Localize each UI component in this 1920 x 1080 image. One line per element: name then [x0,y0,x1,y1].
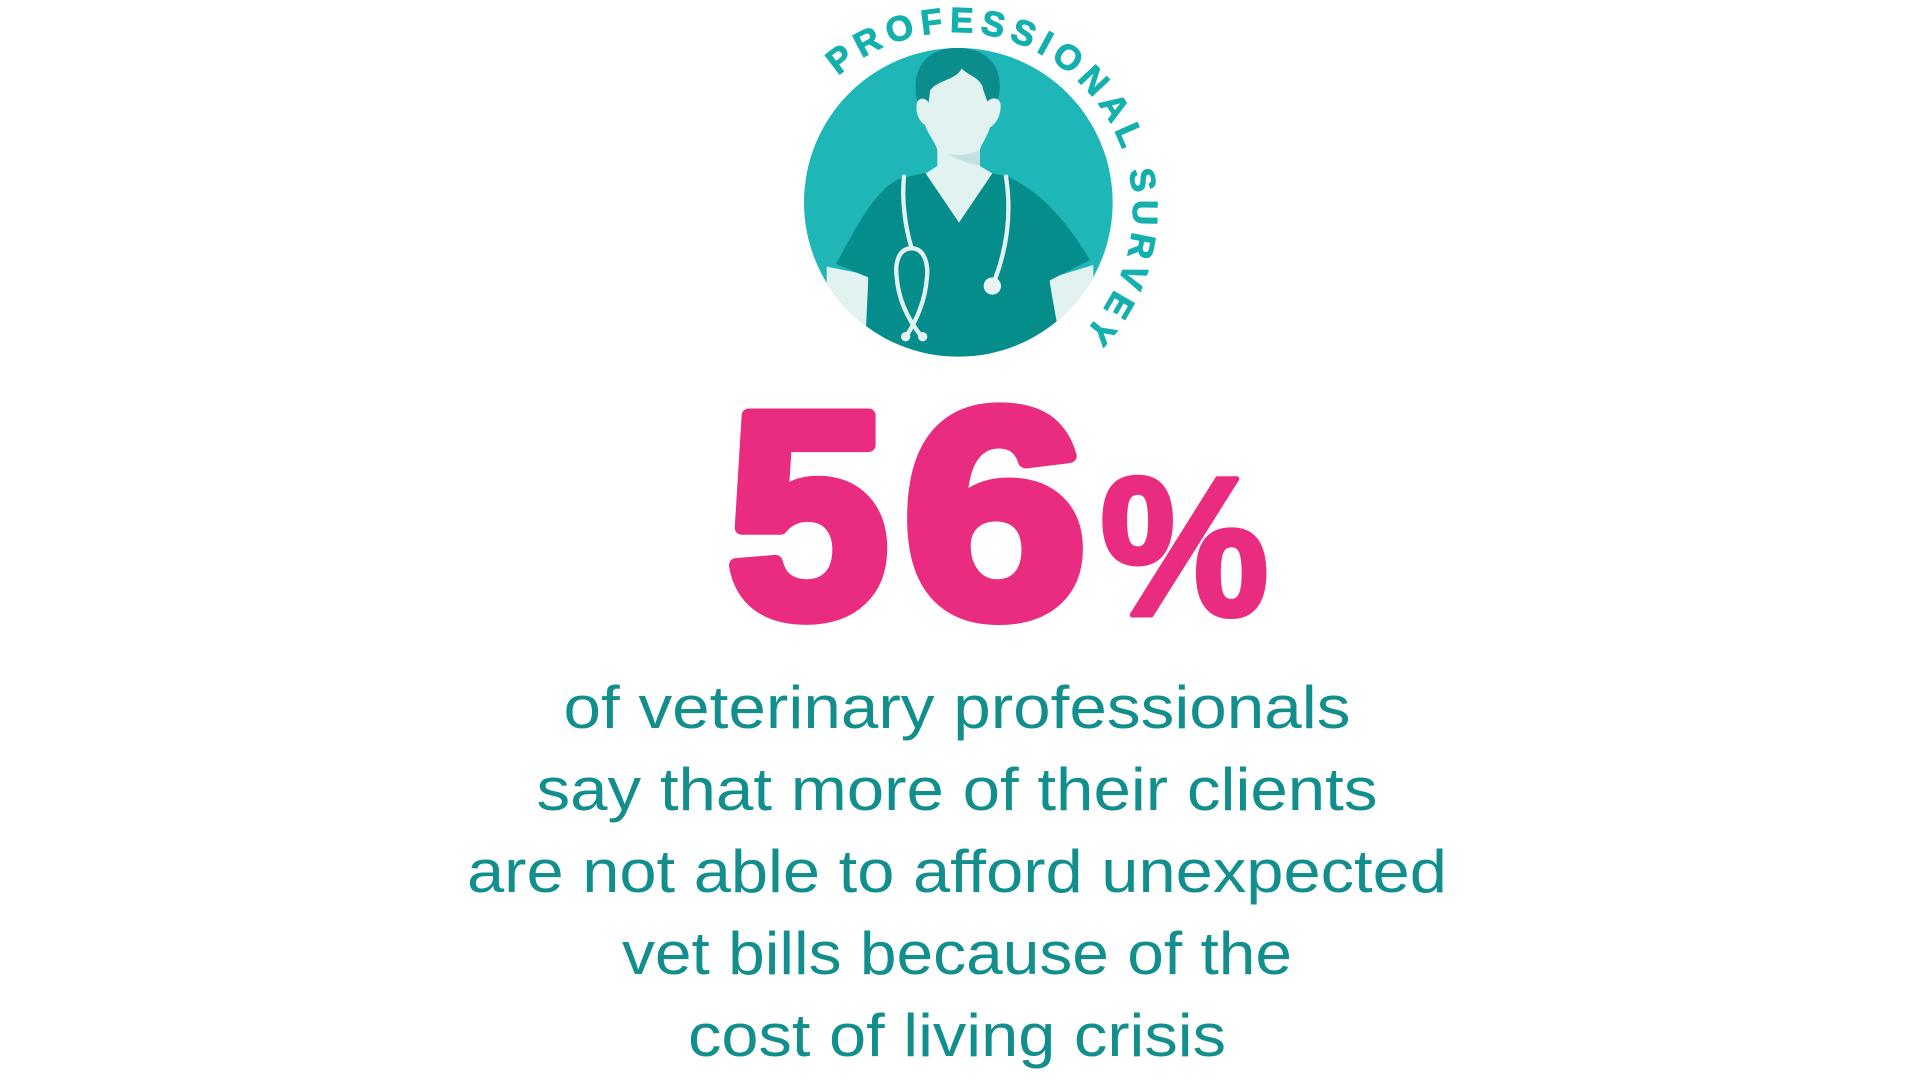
line 1: of veterinary professionals [564,674,1350,741]
scrubs [836,173,1090,358]
hair [916,48,1000,102]
line 2: say that more of their clients [536,756,1378,823]
stethoscope [896,177,1008,337]
infographic canvas [470,7,1443,1068]
stethoscope chest piece [984,277,1001,295]
curved label: professional survey: PROFESSIONAL SURVEY [824,7,1158,348]
neck shadow [947,150,980,166]
line 5: cost of living crisis [688,1002,1226,1069]
description text [467,674,1447,1069]
stethoscope ear tips [901,332,927,341]
face and neck [916,68,1001,223]
figure [827,48,1093,358]
percent sign: % [1100,436,1269,658]
arms [827,265,1093,333]
statistic: 56% [727,350,1269,678]
icon background circle [804,48,1113,357]
line 4: vet bills because of the [622,920,1292,987]
digit 5: 5 [727,353,888,677]
digit 6: 6 [903,350,1087,678]
line 3: are not able to afford unexpected [467,838,1447,905]
icon: veterinary professional in circle [804,48,1113,358]
